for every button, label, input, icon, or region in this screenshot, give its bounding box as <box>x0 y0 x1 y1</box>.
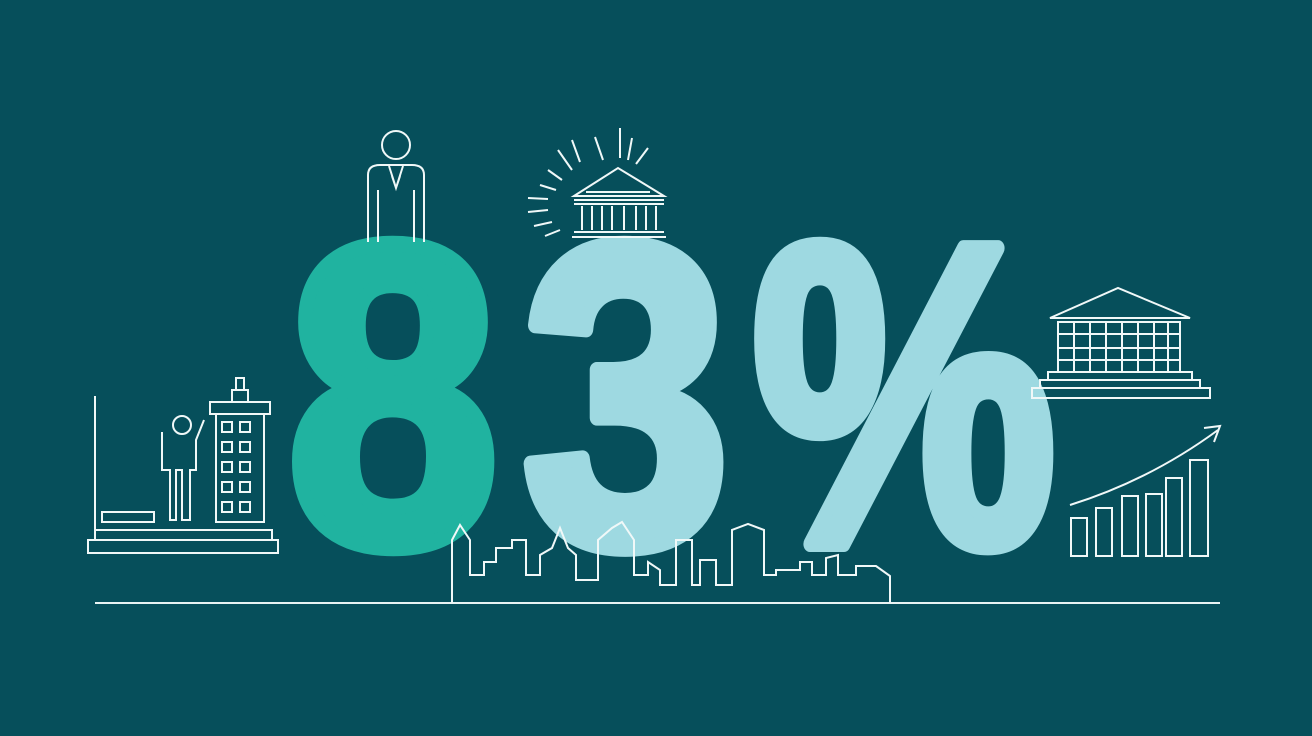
icon: person and tower left <box>88 378 278 553</box>
big number 3 and percent: % <box>752 156 1056 636</box>
icon: government building with rays <box>528 128 666 237</box>
ground line <box>95 602 1220 604</box>
skyline <box>452 522 890 603</box>
big number 8: 8 <box>287 156 499 636</box>
icon: person <box>368 131 424 242</box>
big number 3 and percent: 3 <box>522 156 730 636</box>
big number 3 and percent <box>522 156 1056 636</box>
chart: rising bars with arrow <box>1070 426 1220 556</box>
icon: bank building right <box>1032 288 1210 398</box>
